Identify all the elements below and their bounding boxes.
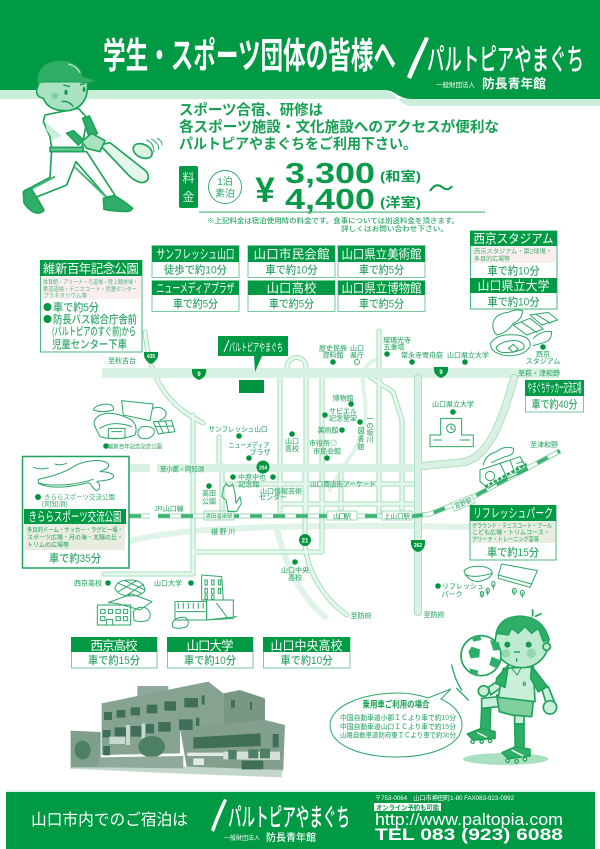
panel: Ishin Park: 防長バス総合庁舎前 xyxy=(53,312,137,326)
footer banner xyxy=(6,790,595,849)
speech balloon: access by car: 中国自動車道山口ＩＣより車で約15分 xyxy=(340,722,456,731)
main roads xyxy=(102,368,559,378)
map base xyxy=(102,331,560,617)
price tag: 料 xyxy=(182,171,195,185)
destination labels: JR山口線 xyxy=(154,504,184,513)
station labels: 宮野駅 xyxy=(453,495,473,511)
vertical labels: 図 xyxy=(358,427,364,435)
station labels: 山口駅 xyxy=(333,512,351,520)
footer contact details: TEL 083 (923) 6088 xyxy=(375,826,563,844)
logo pointer on map xyxy=(218,336,288,372)
shorts xyxy=(497,695,533,717)
panel: Yamaguchi University: 山口大学 xyxy=(186,638,234,653)
shield 262: 262 xyxy=(414,543,422,549)
landmark names: 資料館 xyxy=(322,350,344,360)
panel: Yamaguchi Chuo High School: 車で約10分 xyxy=(280,653,332,667)
panel: Ishin Park: 柔道道場・テニスコート・児童センター xyxy=(43,285,137,293)
vertical labels: 書 xyxy=(358,434,364,443)
bat xyxy=(100,143,148,183)
panel: Refresh Park: 車で約15分 xyxy=(487,545,539,559)
shield 204: 204 xyxy=(259,466,267,472)
panel: New Media Plaza: 車で約5分 xyxy=(173,296,218,310)
panel: Kirara Sports Park xyxy=(22,456,129,568)
head xyxy=(37,82,87,111)
landmark names: 山口商店街アーケード xyxy=(310,480,376,488)
landmark names: 山口 xyxy=(285,438,299,446)
landmark names: 博物館 xyxy=(332,394,354,402)
panel: Ishin Park xyxy=(40,260,142,352)
price note: ※上記料金は宿泊使用時の料金です。食事については別途料金を頂きます。 xyxy=(207,216,459,225)
landmark names: 記念館 xyxy=(238,480,260,488)
panel: Yamaguchi soccer ground xyxy=(525,380,584,412)
landmark names: 記念聖堂 xyxy=(329,414,357,422)
illustration: steam train xyxy=(480,447,527,488)
station labels: 上山口駅 xyxy=(384,512,410,520)
panel: New Media Plaza xyxy=(152,280,239,312)
vertical labels: 川 xyxy=(366,436,374,444)
footer contact details: オンライン予約も可能 xyxy=(376,803,439,812)
landmark names: センター xyxy=(259,492,287,502)
illustration: Saikyo High School xyxy=(97,580,152,625)
landmark names: 美術館 xyxy=(318,426,338,434)
panel: Saikyo Stadium and Prefectural University: 西京スタジアム・第2球場・ xyxy=(474,248,552,256)
panel: Yamaguchi High School xyxy=(248,280,335,312)
ball xyxy=(461,636,501,676)
rivers xyxy=(130,360,470,617)
panel: New Media Plaza: ニューメディアプラザ xyxy=(156,280,234,296)
shield 9 east: 9 xyxy=(439,370,443,376)
landmark names: サンフレッシュ山口 xyxy=(208,426,268,434)
station labels: 湯田温泉駅 xyxy=(206,512,233,520)
panel: Saikyo Stadium and Prefectural University: 山口県立大学 xyxy=(478,278,550,293)
panel: Yamaguchi Chuo High School xyxy=(263,637,350,668)
panel: Shimin Kaikan: 山口市民会館 xyxy=(254,248,330,262)
panel: Saikyo Stadium and Prefectural University: 車で約10分 xyxy=(488,264,540,278)
batter illustration xyxy=(23,61,162,213)
prices: 4,400 xyxy=(285,184,375,216)
head xyxy=(495,618,548,668)
landmark names: 山口大学 xyxy=(154,578,182,588)
logo pointer on map: パルトピアやまぐち xyxy=(229,341,283,354)
shield 204 xyxy=(256,460,270,474)
intro copy xyxy=(179,101,499,153)
panel: Yamaguchi University: 車で約10分 xyxy=(184,653,236,667)
landmark names: 市役所◎ xyxy=(309,438,337,448)
intro copy: スポーツ合宿、研修は xyxy=(179,101,323,119)
arms and wrist bands xyxy=(67,131,83,145)
landmark names: プラザ xyxy=(250,448,270,456)
price tag xyxy=(179,166,198,208)
panel: Art Museum: 山口県立美術館 xyxy=(342,246,422,262)
shadow xyxy=(463,753,548,765)
price note xyxy=(207,216,459,233)
panel: Kirara Sports Park: トリムの広場等 xyxy=(27,541,69,549)
ball xyxy=(131,138,162,161)
panel: Yamaguchi soccer ground: 車で約40分 xyxy=(532,397,578,411)
landmark names: 県庁 xyxy=(350,352,364,360)
hotel location marker xyxy=(239,380,264,393)
arms xyxy=(542,687,555,705)
landmark names: 高田 xyxy=(202,488,216,498)
header logo: 一般財団法人 xyxy=(436,80,476,89)
vertical labels: 館 xyxy=(358,442,364,451)
panel: Ishin Park: 児童センター下車 xyxy=(52,337,127,351)
shirt xyxy=(43,108,87,148)
panel: Kirara Sports Park: きららスポーツ交流公園 xyxy=(44,492,115,502)
landmark names: 維新百年記念記念公園 xyxy=(108,442,162,450)
panel: Prefectural Museum xyxy=(338,280,425,312)
panel: Yamaguchi University xyxy=(167,637,253,668)
prices: ¥ xyxy=(255,171,275,210)
landmark names: スタジアム xyxy=(526,356,560,366)
panel: Shimin Kaikan xyxy=(248,246,335,278)
shield 435: 435 xyxy=(147,354,155,360)
panel: Shimin Kaikan: 車で約10分 xyxy=(266,262,318,276)
landmark names: 五重塔 xyxy=(384,342,404,352)
landmark names: ニューメディア xyxy=(228,440,270,450)
raised leg xyxy=(482,697,498,708)
panel: Saikyo Stadium and Prefectural University: 多目的広場等 xyxy=(474,255,510,263)
landmark names: 歴史民族 xyxy=(319,344,347,352)
intro copy: 各スポーツ施設・文化施設へのアクセスが便利な xyxy=(179,118,499,136)
destination labels: 至津和野 xyxy=(530,440,558,449)
prices: (和室) xyxy=(380,169,421,184)
motion lines xyxy=(452,665,468,700)
landmark names: サビエル xyxy=(329,406,357,416)
panel: Art Museum xyxy=(338,246,425,278)
landmark names: リフレッシュ xyxy=(442,582,484,590)
illustration: Ishin park stadium xyxy=(93,401,175,439)
prices xyxy=(255,158,452,216)
helmet xyxy=(37,61,95,83)
destination labels: 至防府 xyxy=(350,611,372,620)
footer logo: パルトピアやまぐち xyxy=(228,804,350,832)
shield 9 east xyxy=(434,367,448,378)
panel: Sunfresh Yamaguchi xyxy=(152,246,239,278)
station labels xyxy=(204,495,475,520)
panel: Art Museum: 車で約5分 xyxy=(359,262,404,276)
panel: Prefectural Museum: 山口県立博物館 xyxy=(342,280,422,296)
shield 9 west: 9 xyxy=(197,372,201,378)
landmark dots xyxy=(103,344,546,589)
vertical labels: の xyxy=(366,423,374,430)
landmark names: 常永寺雪舟庭 xyxy=(401,350,443,360)
shoes xyxy=(467,728,495,740)
destination labels: 至萩・津和野 xyxy=(518,368,560,378)
speech balloon: access by car: 乗用車ご利用の場合 xyxy=(362,698,430,710)
panel: Prefectural Museum: 車で約5分 xyxy=(359,296,404,310)
map labels xyxy=(74,336,560,620)
panel: Ishin Park: プラネタリウム等 xyxy=(43,292,88,300)
standing leg xyxy=(515,715,524,724)
shirt xyxy=(498,667,535,702)
header logo: 防長青年館 xyxy=(482,76,546,91)
landmark names: 高校 xyxy=(285,444,299,453)
panel: Kirara Sports Park: (阿知須) xyxy=(42,500,68,508)
landmark names: 山口情報芸術 xyxy=(260,486,302,496)
illustration: Prefectural University building xyxy=(430,418,473,447)
destination labels: 椹野川 xyxy=(211,527,235,536)
panel: Sunfresh Yamaguchi: 徒歩で約10分 xyxy=(164,262,227,276)
illustration: Saikyo stadium xyxy=(491,310,558,356)
panel: Refresh Park: リフレッシュパーク xyxy=(473,506,553,520)
shield 9 west xyxy=(192,369,206,380)
destination labels: 至小郡・阿知須 xyxy=(160,464,204,474)
panel: Sunfresh Yamaguchi: サンフレッシュ山口 xyxy=(156,248,234,262)
island illustration xyxy=(33,461,114,491)
panel: Ishin Park: 車で約5分 xyxy=(53,300,99,314)
speech balloon: access by car xyxy=(330,689,462,757)
landmark names xyxy=(74,336,560,598)
landmark names: 山口県立大学 xyxy=(447,350,489,360)
railway xyxy=(129,451,560,516)
header logo xyxy=(407,37,584,91)
illustration: Yuda Onsen white fox xyxy=(222,483,241,512)
price tag: 金 xyxy=(182,190,195,204)
landmark names: 山口県立大学 xyxy=(432,400,474,408)
speech balloon: access by car: 中国自動車道小郡ＩＣより車で約10分 xyxy=(340,713,456,722)
stay type: 素泊 xyxy=(215,187,235,200)
destination labels: 至秋吉台 xyxy=(108,356,136,365)
landmark names: 公園 xyxy=(202,498,216,506)
soccer boy illustration: 6 xyxy=(522,681,526,688)
panel: Saikyo High School: 西京高校 xyxy=(90,638,138,653)
panel: Yamaguchi High School: 車で約5分 xyxy=(269,296,314,310)
landmark names: 高校 xyxy=(288,573,302,582)
legs xyxy=(26,150,115,198)
shield 435 xyxy=(144,352,158,364)
landmark names: 山口 xyxy=(350,344,364,352)
panel: Ishin Park: 維新百年記念公園 xyxy=(43,262,139,276)
title: 学生・スポーツ団体の皆様へ xyxy=(103,35,396,76)
price block xyxy=(179,158,485,233)
panel: Saikyo High School xyxy=(71,637,157,668)
footer logo xyxy=(211,799,350,844)
panel: Saikyo Stadium and Prefectural University: 車で約10分 xyxy=(488,294,540,308)
panel: Kirara Sports Park: 多目的ドーム・サッカー・ラグビー場・ xyxy=(27,526,123,534)
vertical labels: 坂 xyxy=(366,428,374,437)
vertical labels: 一 xyxy=(366,416,374,423)
panel: Refresh Park xyxy=(470,505,556,560)
panel: Refresh Park: グラウンド・テニスコート・プール xyxy=(472,522,552,530)
intro copy: パルトピアやまぐちをご利用下さい。 xyxy=(179,135,417,153)
footer contact details xyxy=(374,793,563,844)
shield 262 xyxy=(411,540,425,552)
header band xyxy=(0,0,600,106)
panel: Yamaguchi Chuo High School: 山口中央高校 xyxy=(270,638,343,653)
photo: Paltopia building xyxy=(70,682,285,777)
panel: Saikyo High School: 車で約15分 xyxy=(88,653,140,667)
panel: Kirara Sports Park: 車で約35分 xyxy=(49,551,101,565)
prices: 3,300 xyxy=(285,158,375,190)
panel: Saikyo Stadium and Prefectural University: 西京スタジアム xyxy=(474,232,554,246)
landmark names: 中原中也 xyxy=(238,472,266,482)
panel: Yamaguchi High School: 山口高校 xyxy=(266,280,317,296)
panel: Saikyo Stadium and Prefectural University xyxy=(470,231,557,309)
shoes xyxy=(23,189,44,213)
illustration: Refresh Park facilities xyxy=(464,564,537,597)
prices: (洋室) xyxy=(380,195,421,210)
soccer boy illustration xyxy=(452,609,557,765)
narrow roads xyxy=(104,331,417,615)
landmark names: パーク xyxy=(442,590,462,598)
panel: Ishin Park: (パルトピアのすぐ前)から xyxy=(52,324,136,338)
panel: Refresh Park: アリーナ・トレーニング室等 xyxy=(472,536,539,544)
footer tagline: 山口市内でのご宿泊は xyxy=(31,811,188,829)
price note: 詳しくはお問い合わせ下さい。 xyxy=(341,224,448,233)
panel: Ishin Park: 体育館・アリーナ・弓道場・陸上競技場・ xyxy=(43,278,138,286)
landmark names: 山口中央 xyxy=(281,566,309,574)
stay type: 1泊 xyxy=(217,176,233,188)
footer contact details: http://www.paltopia.com xyxy=(375,811,563,829)
landmark names: 瑠璃光寺 xyxy=(383,336,411,344)
route shields xyxy=(144,352,448,552)
vertical labels xyxy=(358,416,374,451)
footer logo: 一般財団法人 xyxy=(224,834,260,842)
destination labels: 至防府 xyxy=(424,610,444,619)
panel: Refresh Park: こども広場・トリムコース・ xyxy=(472,528,550,536)
shield 21: 21 xyxy=(302,538,309,544)
shield 21 xyxy=(299,534,311,546)
panel: Kirara Sports Park: きららスポーツ交流公園 xyxy=(28,510,122,524)
speech balloon: access by car: 山陽自動車道防府東ＩＣより車で約30分 xyxy=(340,730,456,740)
stay type xyxy=(208,170,242,204)
illustration: Yamaguchi University xyxy=(172,575,237,628)
footer contact details: 〒753-0064 山口市神田町1-80 FAX083-923-0992 xyxy=(375,793,514,802)
panel: Kirara Sports Park: スポーツ広場・月の海・太陽の丘・ xyxy=(27,534,123,542)
footer logo: 防長青年館 xyxy=(266,831,316,844)
landmark names: 西京 xyxy=(536,350,550,358)
destination labels xyxy=(108,356,560,620)
landmark names: 西京高校 xyxy=(74,578,102,588)
landmark names: 市民会館 xyxy=(313,446,341,456)
